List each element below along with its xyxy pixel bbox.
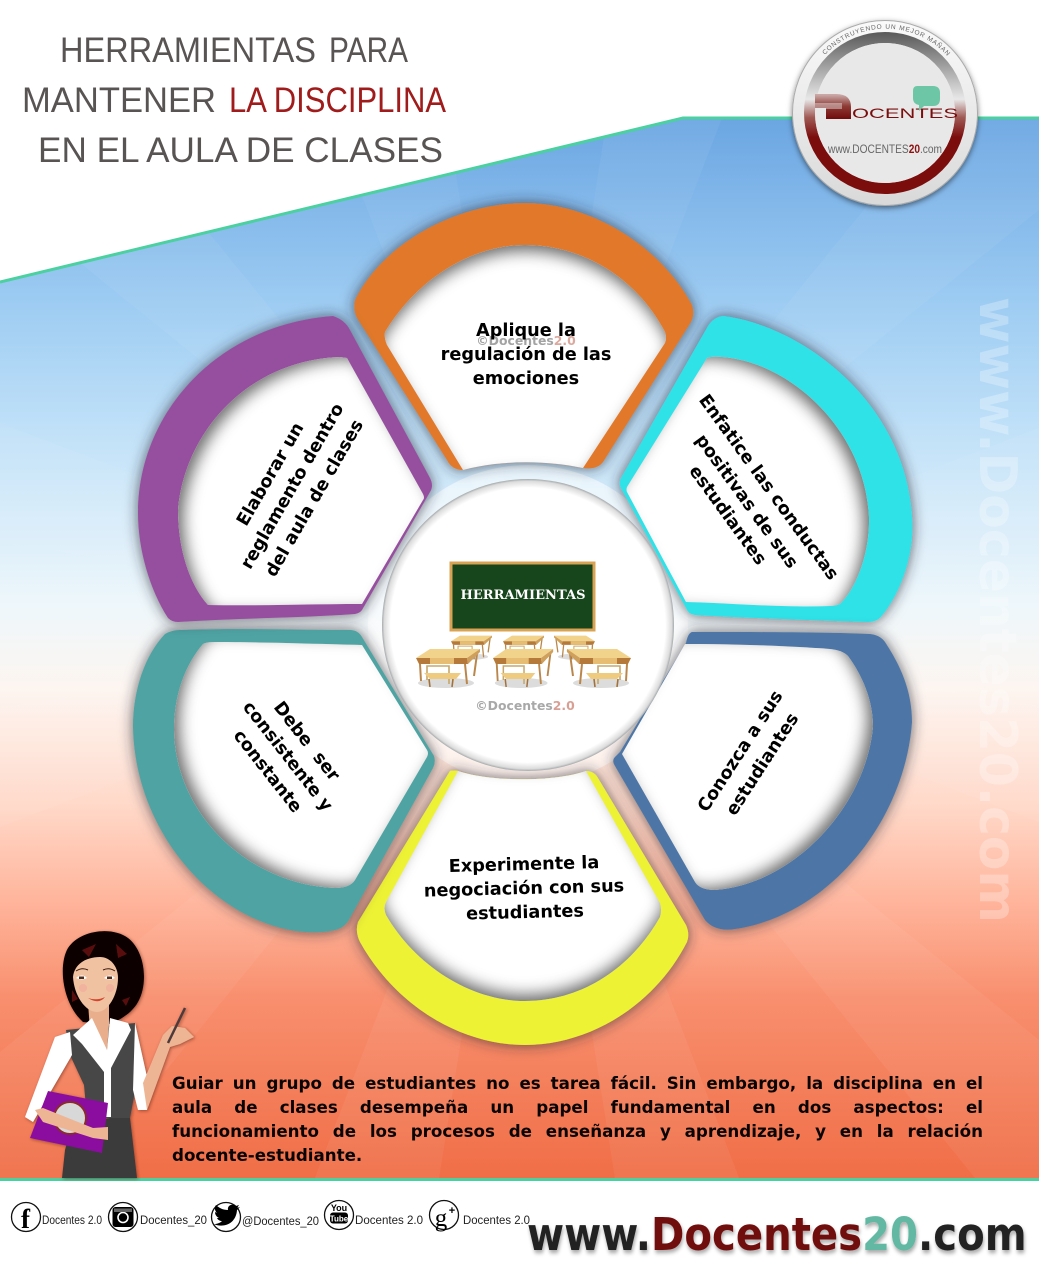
petal: orange: emociones — [473, 369, 579, 389]
title: LA DISCIPLINA — [229, 81, 447, 120]
petal: blue — [613, 632, 912, 930]
watermark: vertical site address: www.Docentes20.com — [967, 297, 1027, 923]
icon: blackboard — [451, 563, 594, 630]
title: PARA — [329, 31, 409, 70]
neck — [88, 1003, 109, 1050]
icon: facebook: f — [21, 1204, 31, 1234]
logo: Docentes badge: www.DOCENTES20.com — [827, 144, 942, 156]
petal: yellow: negociación con sus — [424, 876, 624, 902]
watermark: copyright: ©Docentes2.0 — [475, 698, 575, 713]
intro paragraph: aula de clases desempeña un papel fundamental en dos aspectos: el — [172, 1097, 983, 1117]
icon: classroom desks — [416, 636, 631, 688]
hair — [63, 931, 144, 1024]
petal: cyan: estudiantes — [684, 462, 770, 569]
petal: orange: regulación de las — [441, 345, 611, 365]
intro paragraph: docente-estudiante. — [172, 1145, 362, 1165]
intro paragraph: funcionamiento de los procesos de enseñanza y aprendizaje, y en la relación — [172, 1121, 983, 1141]
logo: Docentes badge: OCENTES — [852, 105, 958, 121]
petal: yellow: Experimente la — [449, 853, 600, 877]
icon: google plus — [430, 1200, 458, 1232]
icon: facebook — [12, 1202, 40, 1234]
petal: purple: reglamento dentro — [237, 400, 348, 573]
purple folder — [30, 1091, 108, 1153]
icon: instagram — [108, 1202, 138, 1232]
title: MANTENER — [22, 81, 216, 120]
social links row — [12, 1200, 530, 1234]
petal: teal: Debe ser — [269, 698, 343, 785]
icon: youtube: You — [331, 1203, 347, 1213]
icon: blackboard: HERRAMIENTAS — [460, 588, 586, 603]
left forearm — [35, 1108, 108, 1140]
petal: teal: constante — [229, 726, 306, 817]
icon: youtube — [324, 1200, 354, 1230]
icon: google plus: g — [435, 1205, 448, 1232]
icon: youtube: Tube — [330, 1214, 349, 1224]
petal: cyan — [620, 316, 912, 622]
petal: blue: Conozca a sus — [694, 687, 787, 816]
petal: purple: del aula de clases — [262, 416, 368, 581]
social links row: Docentes 2.0 — [463, 1215, 530, 1227]
illustration: teacher — [25, 931, 194, 1178]
forearm and hand with pointer — [143, 1026, 194, 1110]
social links row: Docentes_20 — [140, 1215, 207, 1227]
petal: purple: Elaborar un — [233, 419, 308, 530]
center circle — [382, 479, 674, 771]
title: EN EL AULA DE CLASES — [38, 131, 443, 170]
skirt — [62, 1118, 137, 1178]
social links row: @Docentes_20 — [242, 1216, 319, 1228]
footer site address: www.Docentes20.com — [527, 1209, 1027, 1262]
center halo — [368, 465, 688, 785]
intro paragraph — [172, 1073, 983, 1165]
watermark: copyright: ©Docentes2.0 — [476, 333, 576, 348]
petal: teal: consistente y — [238, 698, 336, 816]
vest — [66, 1023, 139, 1118]
intro paragraph: Guiar un grupo de estudiantes no es tarea fácil. Sin embargo, la disciplina en el — [172, 1073, 983, 1093]
petal: orange — [354, 203, 693, 470]
petal: yellow: estudiantes — [466, 901, 584, 925]
icon: twitter — [212, 1202, 240, 1232]
petal: orange: Aplique la — [476, 321, 576, 341]
face — [73, 957, 118, 1012]
social links row: Docentes 2.0 — [355, 1215, 423, 1227]
social links row: Docentes 2.0 — [42, 1215, 102, 1227]
icon: google plus: + — [449, 1205, 455, 1217]
sleeves — [25, 1032, 72, 1122]
title: HERRAMIENTAS — [60, 31, 316, 70]
logo: Docentes badge — [788, 18, 982, 212]
petal: blue: estudiantes — [722, 710, 803, 819]
petal: cyan: positivas de sus — [691, 431, 801, 572]
petal: cyan: Enfatice las conductas — [694, 391, 842, 584]
petal: yellow — [357, 770, 688, 1045]
petal: purple — [138, 316, 432, 622]
petal: teal — [133, 629, 435, 932]
title — [22, 31, 447, 170]
shirt — [73, 1018, 131, 1117]
